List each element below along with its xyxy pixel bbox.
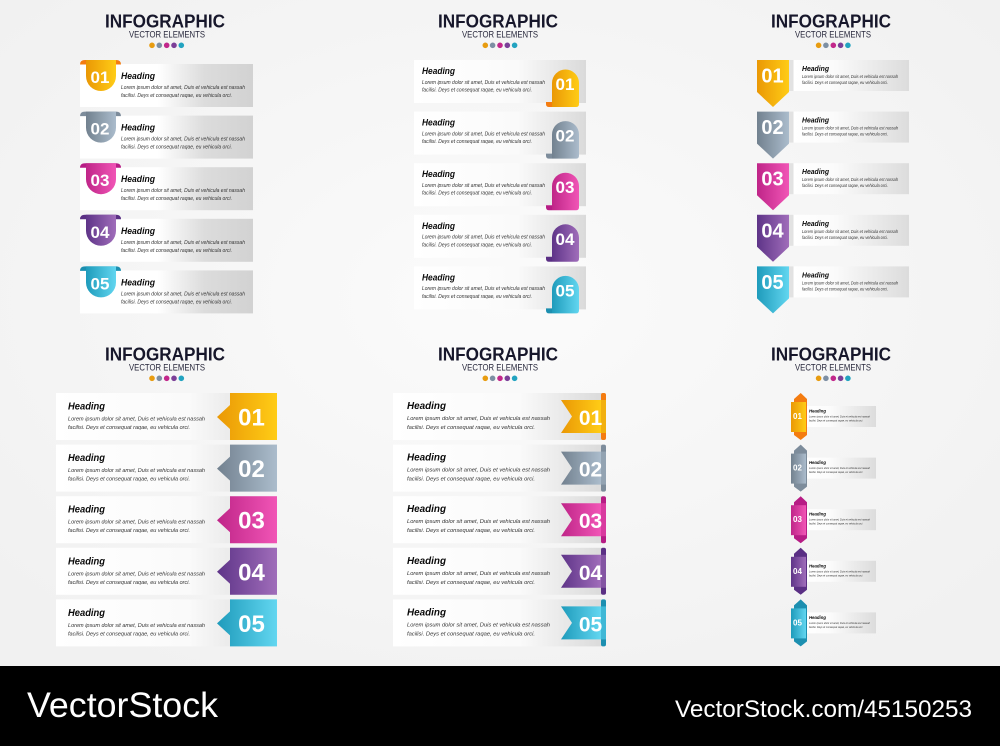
row 04: Heading <box>68 555 106 567</box>
row 04: facilisi. Deys et consequat raqae, eu vehicula orci. <box>422 242 532 248</box>
row 05 <box>757 266 909 313</box>
row 02: 02 <box>91 120 109 139</box>
row 02: Heading <box>121 123 155 134</box>
row 03: Heading <box>407 503 447 515</box>
row 02: facilisi. Deys et consequat raqae, eu vehicula orci. <box>422 139 532 145</box>
row 05: Heading <box>802 270 829 279</box>
panel: infographic 5 notched banners right <box>393 343 606 646</box>
row 03: facilisi. Deys et consequat raqae, eu vehicula orci. <box>802 183 888 188</box>
row 04: 04 <box>761 220 784 242</box>
row 01: Heading <box>121 71 155 82</box>
row 02: 02 <box>761 117 784 139</box>
title block 3: VECTOR ELEMENTS <box>795 30 871 41</box>
row 05: Heading <box>407 606 447 618</box>
row 04: Heading <box>407 555 447 567</box>
row 01: 01 <box>793 412 802 421</box>
row 02: 02 <box>579 459 602 482</box>
title block 3: INFOGRAPHIC <box>771 10 891 31</box>
row 03: Heading <box>121 174 155 185</box>
title block 2: INFOGRAPHIC <box>438 10 558 31</box>
row 04: Lorem ipsum dolor sit amet, Duis et vehicula est nassah <box>802 229 899 234</box>
row 01 <box>791 393 876 440</box>
row 01: facilisi. Deys et consequat raqae, eu vehicula orci. <box>809 418 863 422</box>
row 04 <box>56 548 277 595</box>
row 02: Lorem ipsum dolor sit amet, Duis et vehicula est nassah <box>121 137 245 143</box>
title block 3 <box>771 10 891 48</box>
row 05: Heading <box>809 615 826 621</box>
row 05: facilisi. Deys et consequat raqae, eu vehicula orci. <box>121 299 232 305</box>
row 02: 02 <box>238 456 265 483</box>
row 02: facilisi. Deys et consequat raqae, eu vehicula orci. <box>809 470 863 474</box>
row 05: Lorem ipsum dolor sit amet, Duis et vehicula est nassah <box>121 291 245 297</box>
panel: infographic 6 small hexagon tabs <box>771 343 891 646</box>
row 04 <box>80 215 253 262</box>
row 04: Lorem ipsum dolor sit amet, Duis et vehicula est nassah <box>422 235 545 241</box>
row 05: Lorem ipsum dolor sit amet, Duis et vehicula est nassah <box>802 280 899 285</box>
row 01 <box>757 60 909 107</box>
row 02: Heading <box>422 118 455 129</box>
row 01: facilisi. Deys et consequat raqae, eu vehicula orci. <box>121 93 232 99</box>
title block 6 <box>771 343 891 381</box>
row 03: Lorem ipsum dolor sit amet, Duis et vehicula est nassah <box>121 188 245 194</box>
row 03: facilisi. Deys et consequat raqae, eu vehicula orci. <box>422 191 532 197</box>
row 02: facilisi. Deys et consequat raqae, eu vehicula orci. <box>68 477 190 483</box>
row 02: 02 <box>556 127 574 146</box>
row 04: Heading <box>121 226 155 237</box>
row 03: Lorem ipsum dolor sit amet, Duis et vehicula est nassah <box>809 518 871 522</box>
title block 4: INFOGRAPHIC <box>105 343 225 364</box>
row 01: Lorem ipsum dolor sit amet, Duis et vehicula est nassah <box>68 416 205 422</box>
row 05 <box>80 266 253 313</box>
panel: infographic 3 pointed tabs left <box>757 10 909 313</box>
row 05: facilisi. Deys et consequat raqae, eu vehicula orci. <box>809 625 863 629</box>
row 04: Heading <box>802 219 829 228</box>
row 04: 04 <box>793 567 802 576</box>
row 03: facilisi. Deys et consequat raqae, eu vehicula orci. <box>121 196 232 202</box>
row 02: Heading <box>407 452 447 464</box>
row 05: Heading <box>68 607 106 619</box>
row 01: 01 <box>579 407 602 430</box>
row 03: Lorem ipsum dolor sit amet, Duis et vehicula est nassah <box>68 520 205 526</box>
row 03: Heading <box>422 169 455 180</box>
row 01: facilisi. Deys et consequat raqae, eu vehicula orci. <box>802 80 888 85</box>
row 04: 04 <box>556 230 575 249</box>
title block 2 <box>438 10 558 48</box>
row 03: 03 <box>579 510 602 533</box>
row 05: facilisi. Deys et consequat raqae, eu vehicula orci. <box>407 631 535 637</box>
row 04: Lorem ipsum dolor sit amet, Duis et vehicula est nassah <box>809 569 871 573</box>
row 03: Heading <box>68 504 106 516</box>
panel: infographic 4 arrow blocks right <box>56 343 277 646</box>
row 03 <box>757 163 909 210</box>
row 01: Lorem ipsum dolor sit amet, Duis et vehicula est nassah <box>422 80 545 86</box>
row 03: Lorem ipsum dolor sit amet, Duis et vehicula est nassah <box>802 177 899 182</box>
row 01: 01 <box>238 404 265 432</box>
row 03 <box>56 496 277 543</box>
row 03 <box>791 496 876 543</box>
row 04: Heading <box>422 221 455 232</box>
row 05: facilisi. Deys et consequat raqae, eu vehicula orci. <box>802 286 888 291</box>
panel: infographic 2 rounded tabs right <box>414 10 586 313</box>
row 04: 04 <box>238 559 265 586</box>
row 02 <box>80 112 253 159</box>
row 05: Lorem ipsum dolor sit amet, Duis et vehicula est nassah <box>422 286 545 292</box>
row 05: Heading <box>422 272 455 283</box>
row 01: 01 <box>761 66 784 88</box>
row 01 <box>80 60 253 107</box>
title block 2: VECTOR ELEMENTS <box>462 30 538 41</box>
row 01: Heading <box>407 400 447 412</box>
row 01: facilisi. Deys et consequat raqae, eu vehicula orci. <box>407 425 535 431</box>
row 04 <box>393 548 606 595</box>
row 03: Lorem ipsum dolor sit amet, Duis et vehicula est nassah <box>407 519 550 525</box>
row 04: facilisi. Deys et consequat raqae, eu vehicula orci. <box>809 573 863 577</box>
row 05: facilisi. Deys et consequat raqae, eu vehicula orci. <box>422 294 532 300</box>
row 02 <box>393 445 606 492</box>
row 01 <box>56 393 277 440</box>
row 02: facilisi. Deys et consequat raqae, eu vehicula orci. <box>407 477 535 483</box>
row 05: Lorem ipsum dolor sit amet, Duis et vehicula est nassah <box>68 623 205 629</box>
row 02: Lorem ipsum dolor sit amet, Duis et vehicula est nassah <box>68 468 205 474</box>
row 02 <box>757 112 909 159</box>
row 02: Lorem ipsum dolor sit amet, Duis et vehicula est nassah <box>407 468 550 474</box>
panel: infographic 1 ribbon tabs left <box>80 10 253 313</box>
row 04: facilisi. Deys et consequat raqae, eu vehicula orci. <box>68 580 190 586</box>
row 03: Heading <box>802 167 829 176</box>
row 05: Lorem ipsum dolor sit amet, Duis et vehicula est nassah <box>809 621 871 625</box>
row 04: facilisi. Deys et consequat raqae, eu vehicula orci. <box>121 248 232 254</box>
row 05 <box>791 599 876 646</box>
row 02: Lorem ipsum dolor sit amet, Duis et vehicula est nassah <box>422 131 545 137</box>
row 01: Heading <box>809 408 826 414</box>
row 01: Heading <box>422 66 455 77</box>
row 01: 01 <box>91 68 109 87</box>
row 04 <box>414 215 586 262</box>
row 02: facilisi. Deys et consequat raqae, eu vehicula orci. <box>121 145 232 151</box>
row 05: 05 <box>556 281 574 300</box>
row 04: facilisi. Deys et consequat raqae, eu vehicula orci. <box>802 235 888 240</box>
row 01 <box>414 60 586 107</box>
row 02: Heading <box>802 116 829 125</box>
row 05 <box>56 599 277 646</box>
footer bar: VectorStock <box>27 686 219 725</box>
title block 1: VECTOR ELEMENTS <box>129 30 205 41</box>
row 02: 02 <box>793 464 802 473</box>
row 05: 05 <box>793 618 802 627</box>
title block 1 <box>105 10 225 48</box>
row 03 <box>393 496 606 543</box>
row 03: 03 <box>91 171 109 190</box>
row 03: 03 <box>556 178 574 197</box>
row 05 <box>414 266 586 313</box>
row 03 <box>80 163 253 210</box>
row 05: 05 <box>238 611 265 638</box>
row 01: Lorem ipsum dolor sit amet, Duis et vehicula est nassah <box>809 414 871 418</box>
row 04: Heading <box>809 563 826 569</box>
row 02: Lorem ipsum dolor sit amet, Duis et vehicula est nassah <box>802 126 899 131</box>
row 04: 04 <box>579 562 602 585</box>
row 04 <box>757 215 909 262</box>
row 02: Heading <box>68 452 106 464</box>
row 02 <box>414 112 586 159</box>
footer bar: VectorStock.com/45150253 <box>675 696 972 723</box>
title block 5: VECTOR ELEMENTS <box>462 363 538 374</box>
row 05 <box>393 599 606 646</box>
row 03: Lorem ipsum dolor sit amet, Duis et vehicula est nassah <box>422 183 545 189</box>
title block 4 <box>105 343 225 381</box>
row 01: Lorem ipsum dolor sit amet, Duis et vehicula est nassah <box>121 85 245 91</box>
row 05: 05 <box>761 272 784 294</box>
row 04 <box>791 548 876 595</box>
title block 6: VECTOR ELEMENTS <box>795 363 871 374</box>
row 01: facilisi. Deys et consequat raqae, eu vehicula orci. <box>422 88 532 94</box>
row 04: 04 <box>91 223 110 242</box>
title block 1: INFOGRAPHIC <box>105 10 225 31</box>
row 02: Heading <box>809 460 826 466</box>
row 03: 03 <box>793 515 802 524</box>
row 03: facilisi. Deys et consequat raqae, eu vehicula orci. <box>68 528 190 534</box>
row 04: Lorem ipsum dolor sit amet, Duis et vehicula est nassah <box>407 571 550 577</box>
row 05: facilisi. Deys et consequat raqae, eu vehicula orci. <box>68 631 190 637</box>
title block 4: VECTOR ELEMENTS <box>129 363 205 374</box>
row 01: Heading <box>68 400 106 412</box>
footer bar <box>0 666 1000 746</box>
row 05: Lorem ipsum dolor sit amet, Duis et vehicula est nassah <box>407 622 550 628</box>
row 01: facilisi. Deys et consequat raqae, eu vehicula orci. <box>68 425 190 431</box>
row 01: Lorem ipsum dolor sit amet, Duis et vehicula est nassah <box>802 74 899 79</box>
row 05: 05 <box>579 613 602 636</box>
row 01: Heading <box>802 64 829 73</box>
row 02: facilisi. Deys et consequat raqae, eu vehicula orci. <box>802 132 888 137</box>
row 03 <box>414 163 586 210</box>
row 04: facilisi. Deys et consequat raqae, eu vehicula orci. <box>407 580 535 586</box>
row 03: 03 <box>761 169 784 191</box>
title block 5: INFOGRAPHIC <box>438 343 558 364</box>
row 05: Heading <box>121 277 155 288</box>
row 03: 03 <box>238 508 265 535</box>
row 03: facilisi. Deys et consequat raqae, eu vehicula orci. <box>407 528 535 534</box>
row 04: Lorem ipsum dolor sit amet, Duis et vehicula est nassah <box>121 240 245 246</box>
row 01 <box>393 393 606 440</box>
row 02 <box>56 445 277 492</box>
row 03: facilisi. Deys et consequat raqae, eu vehicula orci. <box>809 522 863 526</box>
title block 6: INFOGRAPHIC <box>771 343 891 364</box>
title block 5 <box>438 343 558 381</box>
row 02 <box>791 445 876 492</box>
row 04: Lorem ipsum dolor sit amet, Duis et vehicula est nassah <box>68 571 205 577</box>
row 02: Lorem ipsum dolor sit amet, Duis et vehicula est nassah <box>809 466 871 470</box>
row 01: Lorem ipsum dolor sit amet, Duis et vehicula est nassah <box>407 416 550 422</box>
row 05: 05 <box>91 274 109 293</box>
row 03: Heading <box>809 512 826 518</box>
row 01: 01 <box>556 75 574 94</box>
